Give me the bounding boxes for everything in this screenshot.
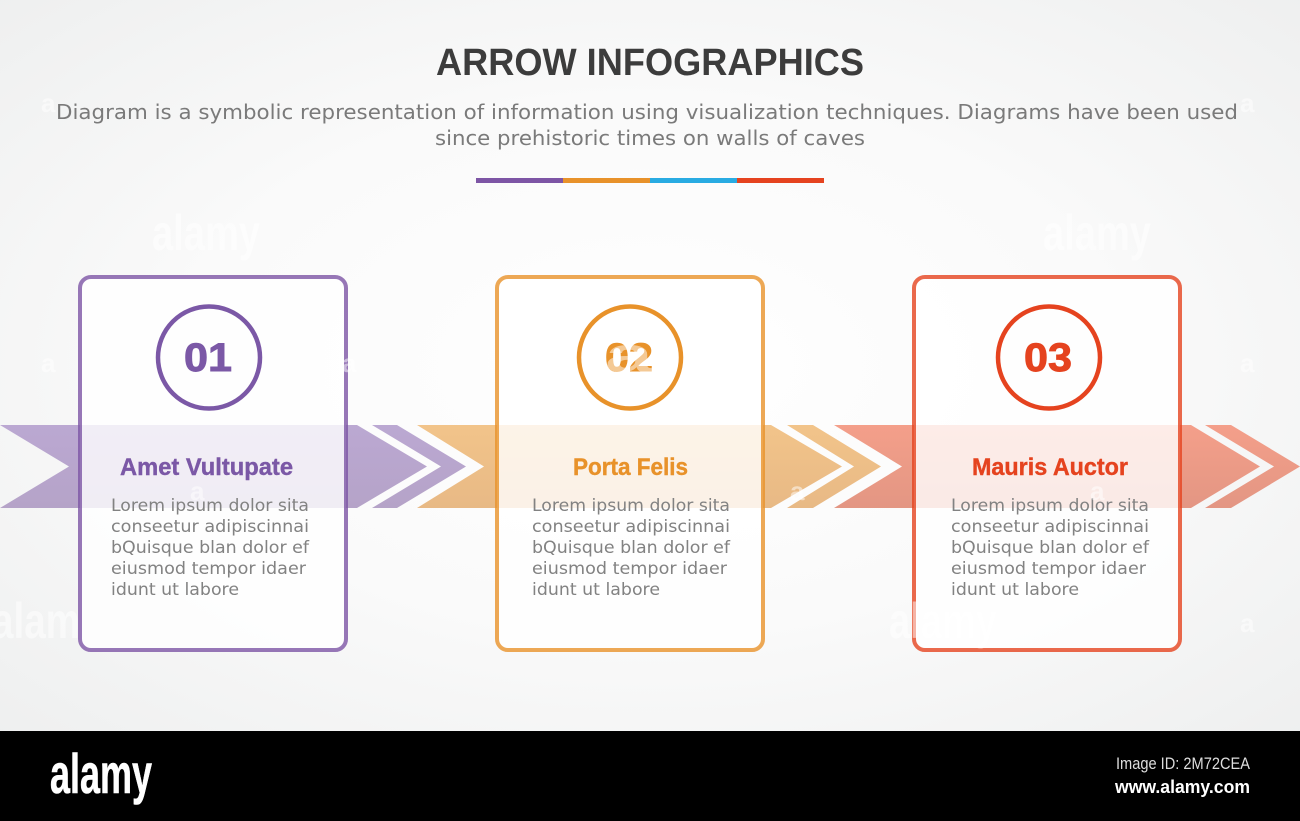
watermark: alamy	[152, 205, 260, 261]
number badge 02: 02	[605, 336, 653, 380]
footer bar	[0, 731, 1300, 821]
body text: bQuisque blan dolor ef	[111, 538, 310, 557]
body text: Lorem ipsum dolor sita	[111, 496, 309, 515]
footer logo: alamy	[50, 742, 152, 805]
watermark: a	[342, 348, 357, 378]
watermark: alamy	[889, 593, 997, 649]
body text	[951, 496, 1150, 599]
watermark: a	[790, 476, 805, 506]
body text: conseetur adipiscinnai	[532, 517, 730, 536]
panel: step 01	[80, 277, 346, 650]
subtitle	[56, 100, 1238, 150]
body text: conseetur adipiscinnai	[951, 517, 1149, 536]
number badge 01	[158, 306, 260, 408]
watermark: alamy	[1043, 205, 1151, 261]
panel: step 02	[497, 277, 763, 650]
watermark: a	[1240, 608, 1255, 638]
number badge 03: 03	[1024, 336, 1072, 380]
watermark: a	[190, 476, 205, 506]
purple arrow segment	[0, 425, 466, 508]
heading: Porta Felis: Porta Felis	[573, 454, 688, 481]
body text: eiusmod tempor idaer	[532, 559, 727, 578]
red arrow segment	[834, 425, 1300, 508]
body text: idunt ut labore	[951, 580, 1079, 599]
watermark: a	[41, 88, 56, 118]
card outline	[497, 277, 763, 650]
orange arrow segment	[417, 425, 881, 508]
body text: Lorem ipsum dolor sita	[951, 496, 1149, 515]
subtitle: Diagram is a symbolic representation of information using visualization techniques. Diagrams have been used	[56, 100, 1238, 124]
watermark: a	[41, 348, 56, 378]
watermark: a	[1240, 348, 1255, 378]
heading: Amet Vultupate: Amet Vultupate	[120, 454, 293, 481]
website: www.alamy.com	[1114, 777, 1250, 797]
body text	[532, 496, 731, 599]
image id: Image ID: 2M72CEA	[1116, 754, 1251, 773]
card outline	[914, 277, 1180, 650]
body text: bQuisque blan dolor ef	[951, 538, 1150, 557]
number badge 03	[998, 306, 1100, 408]
number badge 02	[579, 306, 681, 408]
number badge 01: 01	[184, 336, 232, 380]
body text: eiusmod tempor idaer	[111, 559, 306, 578]
body text: conseetur adipiscinnai	[111, 517, 309, 536]
body text: bQuisque blan dolor ef	[532, 538, 731, 557]
heading: Mauris Auctor: Mauris Auctor	[972, 454, 1128, 481]
subtitle: since prehistoric times on walls of caves	[435, 126, 865, 150]
arrow band	[0, 425, 1300, 508]
watermark	[0, 88, 1255, 649]
title divider	[476, 178, 824, 183]
card outline	[80, 277, 346, 650]
watermark: a	[1240, 88, 1255, 118]
title: ARROW INFOGRAPHICS	[436, 42, 864, 84]
body text: idunt ut labore	[111, 580, 239, 599]
watermark: a	[605, 327, 655, 383]
body text: Lorem ipsum dolor sita	[532, 496, 730, 515]
body text	[111, 496, 310, 599]
panel: step 03	[914, 277, 1180, 650]
body text: eiusmod tempor idaer	[951, 559, 1146, 578]
watermark: a	[1090, 476, 1105, 506]
body text: idunt ut labore	[532, 580, 660, 599]
